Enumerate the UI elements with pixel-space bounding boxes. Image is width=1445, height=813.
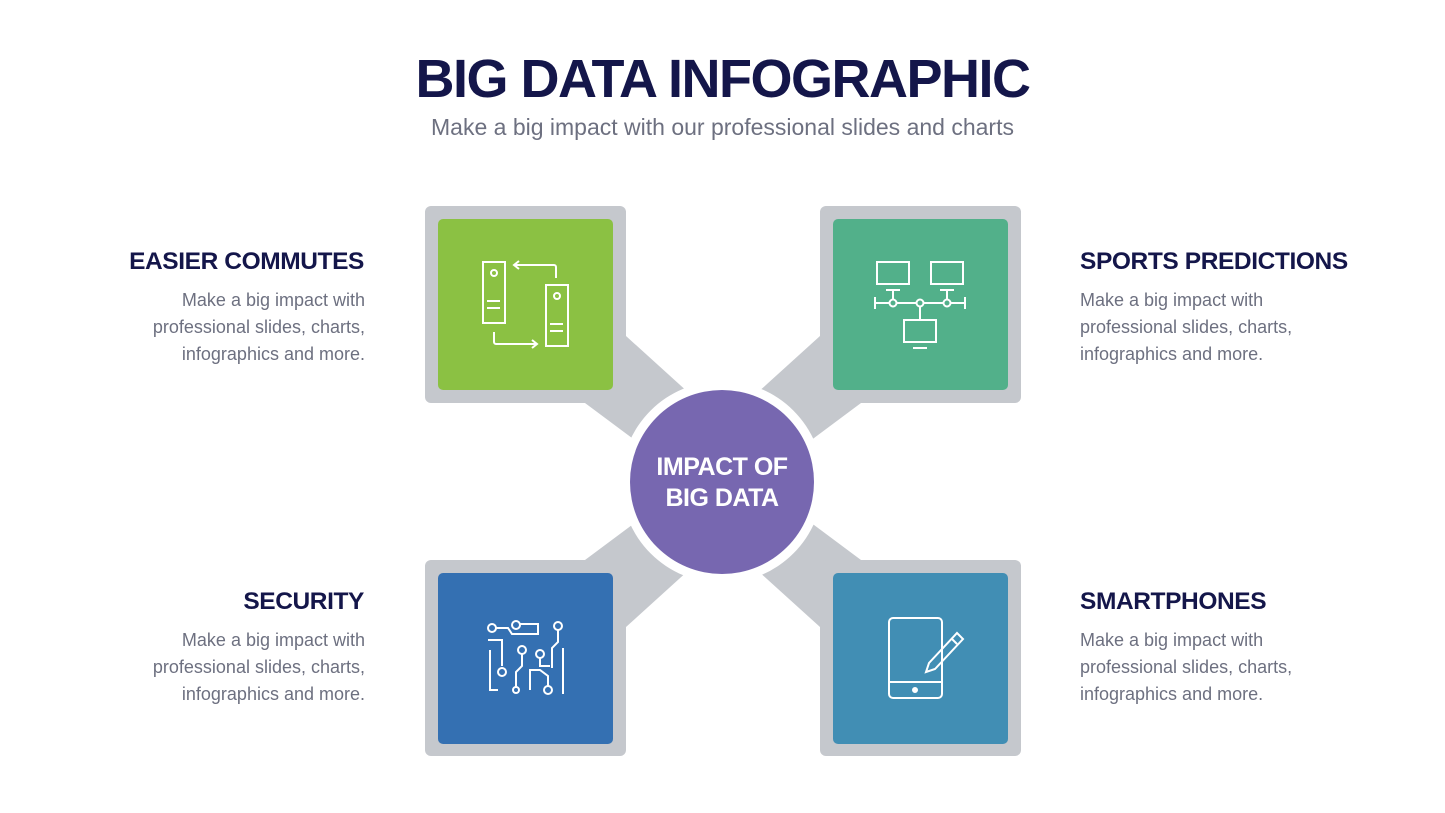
text: easier commutes [129, 248, 365, 364]
text: infographics and more. [182, 344, 365, 364]
text: professional slides, charts, [153, 657, 365, 677]
text: professional slides, charts, [1080, 317, 1292, 337]
panel: security box [425, 560, 626, 756]
text: SECURITY [243, 588, 364, 615]
text: SMARTPHONES [1080, 588, 1266, 615]
text: Make a big impact with [1080, 290, 1263, 310]
center circle [621, 381, 823, 583]
text: security [153, 588, 365, 704]
text: infographics and more. [1080, 344, 1263, 364]
panel: smartphones box [820, 560, 1021, 756]
center circle: BIG DATA [665, 484, 779, 512]
text: smartphones [1080, 588, 1292, 704]
text: sports predictions [1080, 248, 1348, 364]
text: professional slides, charts, [1080, 657, 1292, 677]
panel: sports predictions box [820, 206, 1021, 403]
center circle: IMPACT OF [656, 453, 788, 481]
connectors [585, 336, 861, 627]
text: Make a big impact with [182, 290, 365, 310]
icon: servers exchange [483, 261, 568, 348]
text: SPORTS PREDICTIONS [1080, 248, 1348, 275]
text: infographics and more. [182, 684, 365, 704]
icon: network [875, 262, 965, 348]
text: professional slides, charts, [153, 317, 365, 337]
text: EASIER COMMUTES [129, 248, 364, 275]
panel: easier commutes box [425, 206, 626, 403]
icon: circuit [488, 621, 563, 694]
title: BIG DATA INFOGRAPHIC [416, 49, 1029, 109]
subtitle: Make a big impact with our professional slides and charts [431, 114, 1014, 140]
text: Make a big impact with [1080, 630, 1263, 650]
text: Make a big impact with [182, 630, 365, 650]
text: infographics and more. [1080, 684, 1263, 704]
icon: tablet with pen [889, 618, 963, 698]
